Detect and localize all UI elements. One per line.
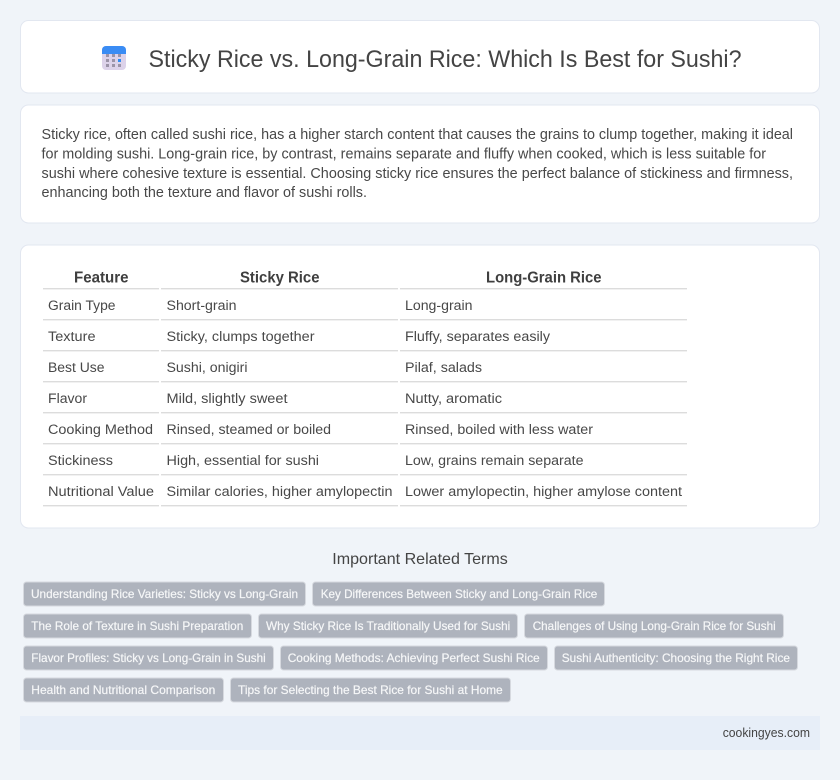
- table header row: Feature: [74, 270, 129, 286]
- tag: Why Sticky Rice Is Traditionally Used for Sushi: [266, 619, 510, 633]
- row: best use: Sushi, onigiri: [166, 360, 248, 376]
- row: texture: Texture: [48, 329, 96, 345]
- table header row: Long-Grain Rice: [486, 270, 602, 286]
- heading: important related terms: Important Related Terms: [332, 551, 508, 568]
- tag: [24, 614, 252, 638]
- header panel: [20, 20, 820, 93]
- intro paragraph: for molding sushi. Long-grain rice, by contrast, remains separate and fluffy when cooked, which is less suitable for: [42, 146, 766, 162]
- tag: [554, 646, 798, 670]
- row: flavor: [48, 391, 502, 407]
- tag: Cooking Methods: Achieving Perfect Sushi Rice: [288, 651, 540, 665]
- intro paragraph: enhancing both the texture and flavor of sushi rolls.: [42, 185, 367, 201]
- tag: [524, 614, 784, 638]
- row: cooking method: Cooking Method: [48, 422, 153, 438]
- tag: Challenges of Using Long-Grain Rice for Sushi: [533, 619, 776, 633]
- tag: Understanding Rice Varieties: Sticky vs Long-Grain: [31, 587, 298, 601]
- tag: Sushi Authenticity: Choosing the Right Rice: [562, 651, 790, 665]
- panel: introduction: [20, 105, 820, 223]
- intro paragraph: Sticky rice, often called sushi rice, has a higher starch content that causes the grains to clump together, making it ideal: [42, 127, 793, 143]
- panel: comparison table: [20, 245, 820, 528]
- row: cooking method: [48, 422, 593, 438]
- tag: The Role of Texture in Sushi Preparation: [31, 619, 243, 633]
- tag: [24, 582, 306, 606]
- tag: Health and Nutritional Comparison: [31, 683, 215, 697]
- row: nutritional value: [48, 484, 682, 500]
- row: texture: [48, 329, 551, 345]
- row: stickiness: High, essential for sushi: [166, 453, 319, 469]
- row: cooking method: Rinsed, boiled with less water: [405, 422, 593, 438]
- row: flavor: Mild, slightly sweet: [166, 391, 288, 407]
- row: best use: Pilaf, salads: [405, 360, 482, 376]
- tag: [280, 646, 548, 670]
- row: nutritional value: Nutritional Value: [48, 484, 154, 500]
- tag: [24, 678, 224, 702]
- row: stickiness: Stickiness: [48, 453, 113, 469]
- tag: [24, 646, 274, 670]
- tag: Key Differences Between Sticky and Long-Grain Rice: [321, 587, 598, 601]
- tag: Flavor Profiles: Sticky vs Long-Grain in Sushi: [31, 651, 266, 665]
- row: nutritional value: Lower amylopectin, higher amylose content: [405, 484, 682, 500]
- source label: cookingyes.com: [723, 726, 810, 740]
- row: grain type: [48, 298, 472, 314]
- row: stickiness: Low, grains remain separate: [405, 453, 584, 469]
- row: grain type: Long-grain: [405, 298, 472, 314]
- row: texture: Sticky, clumps together: [166, 329, 315, 345]
- table header row: [74, 270, 602, 286]
- icon: calendar: [102, 46, 126, 70]
- tag: [312, 582, 604, 606]
- table header row: Sticky Rice: [240, 270, 320, 286]
- row: best use: [48, 360, 482, 376]
- tag: Tips for Selecting the Best Rice for Sushi at Home: [238, 683, 503, 697]
- row: cooking method: Rinsed, steamed or boiled: [166, 422, 331, 438]
- row: stickiness: [48, 453, 584, 469]
- row: grain type: Short-grain: [166, 298, 236, 314]
- row: flavor: Nutty, aromatic: [405, 391, 502, 407]
- intro paragraph: [42, 127, 793, 201]
- intro paragraph: sushi where cohesive texture is essential. Choosing sticky rice ensures the perfect balance of stickiness and firmness,: [42, 166, 793, 182]
- tag: [230, 678, 510, 702]
- tag: [258, 614, 518, 638]
- row: flavor: Flavor: [48, 391, 87, 407]
- row: nutritional value: Similar calories, higher amylopectin: [166, 484, 392, 500]
- row: best use: Best Use: [48, 360, 105, 376]
- row: texture: Fluffy, separates easily: [405, 329, 551, 345]
- footer bar: [20, 716, 820, 750]
- row: grain type: Grain Type: [48, 298, 116, 314]
- related terms tags: [24, 582, 798, 702]
- title: Sticky Rice vs. Long-Grain Rice: Which Is Best for Sushi?: [148, 46, 742, 73]
